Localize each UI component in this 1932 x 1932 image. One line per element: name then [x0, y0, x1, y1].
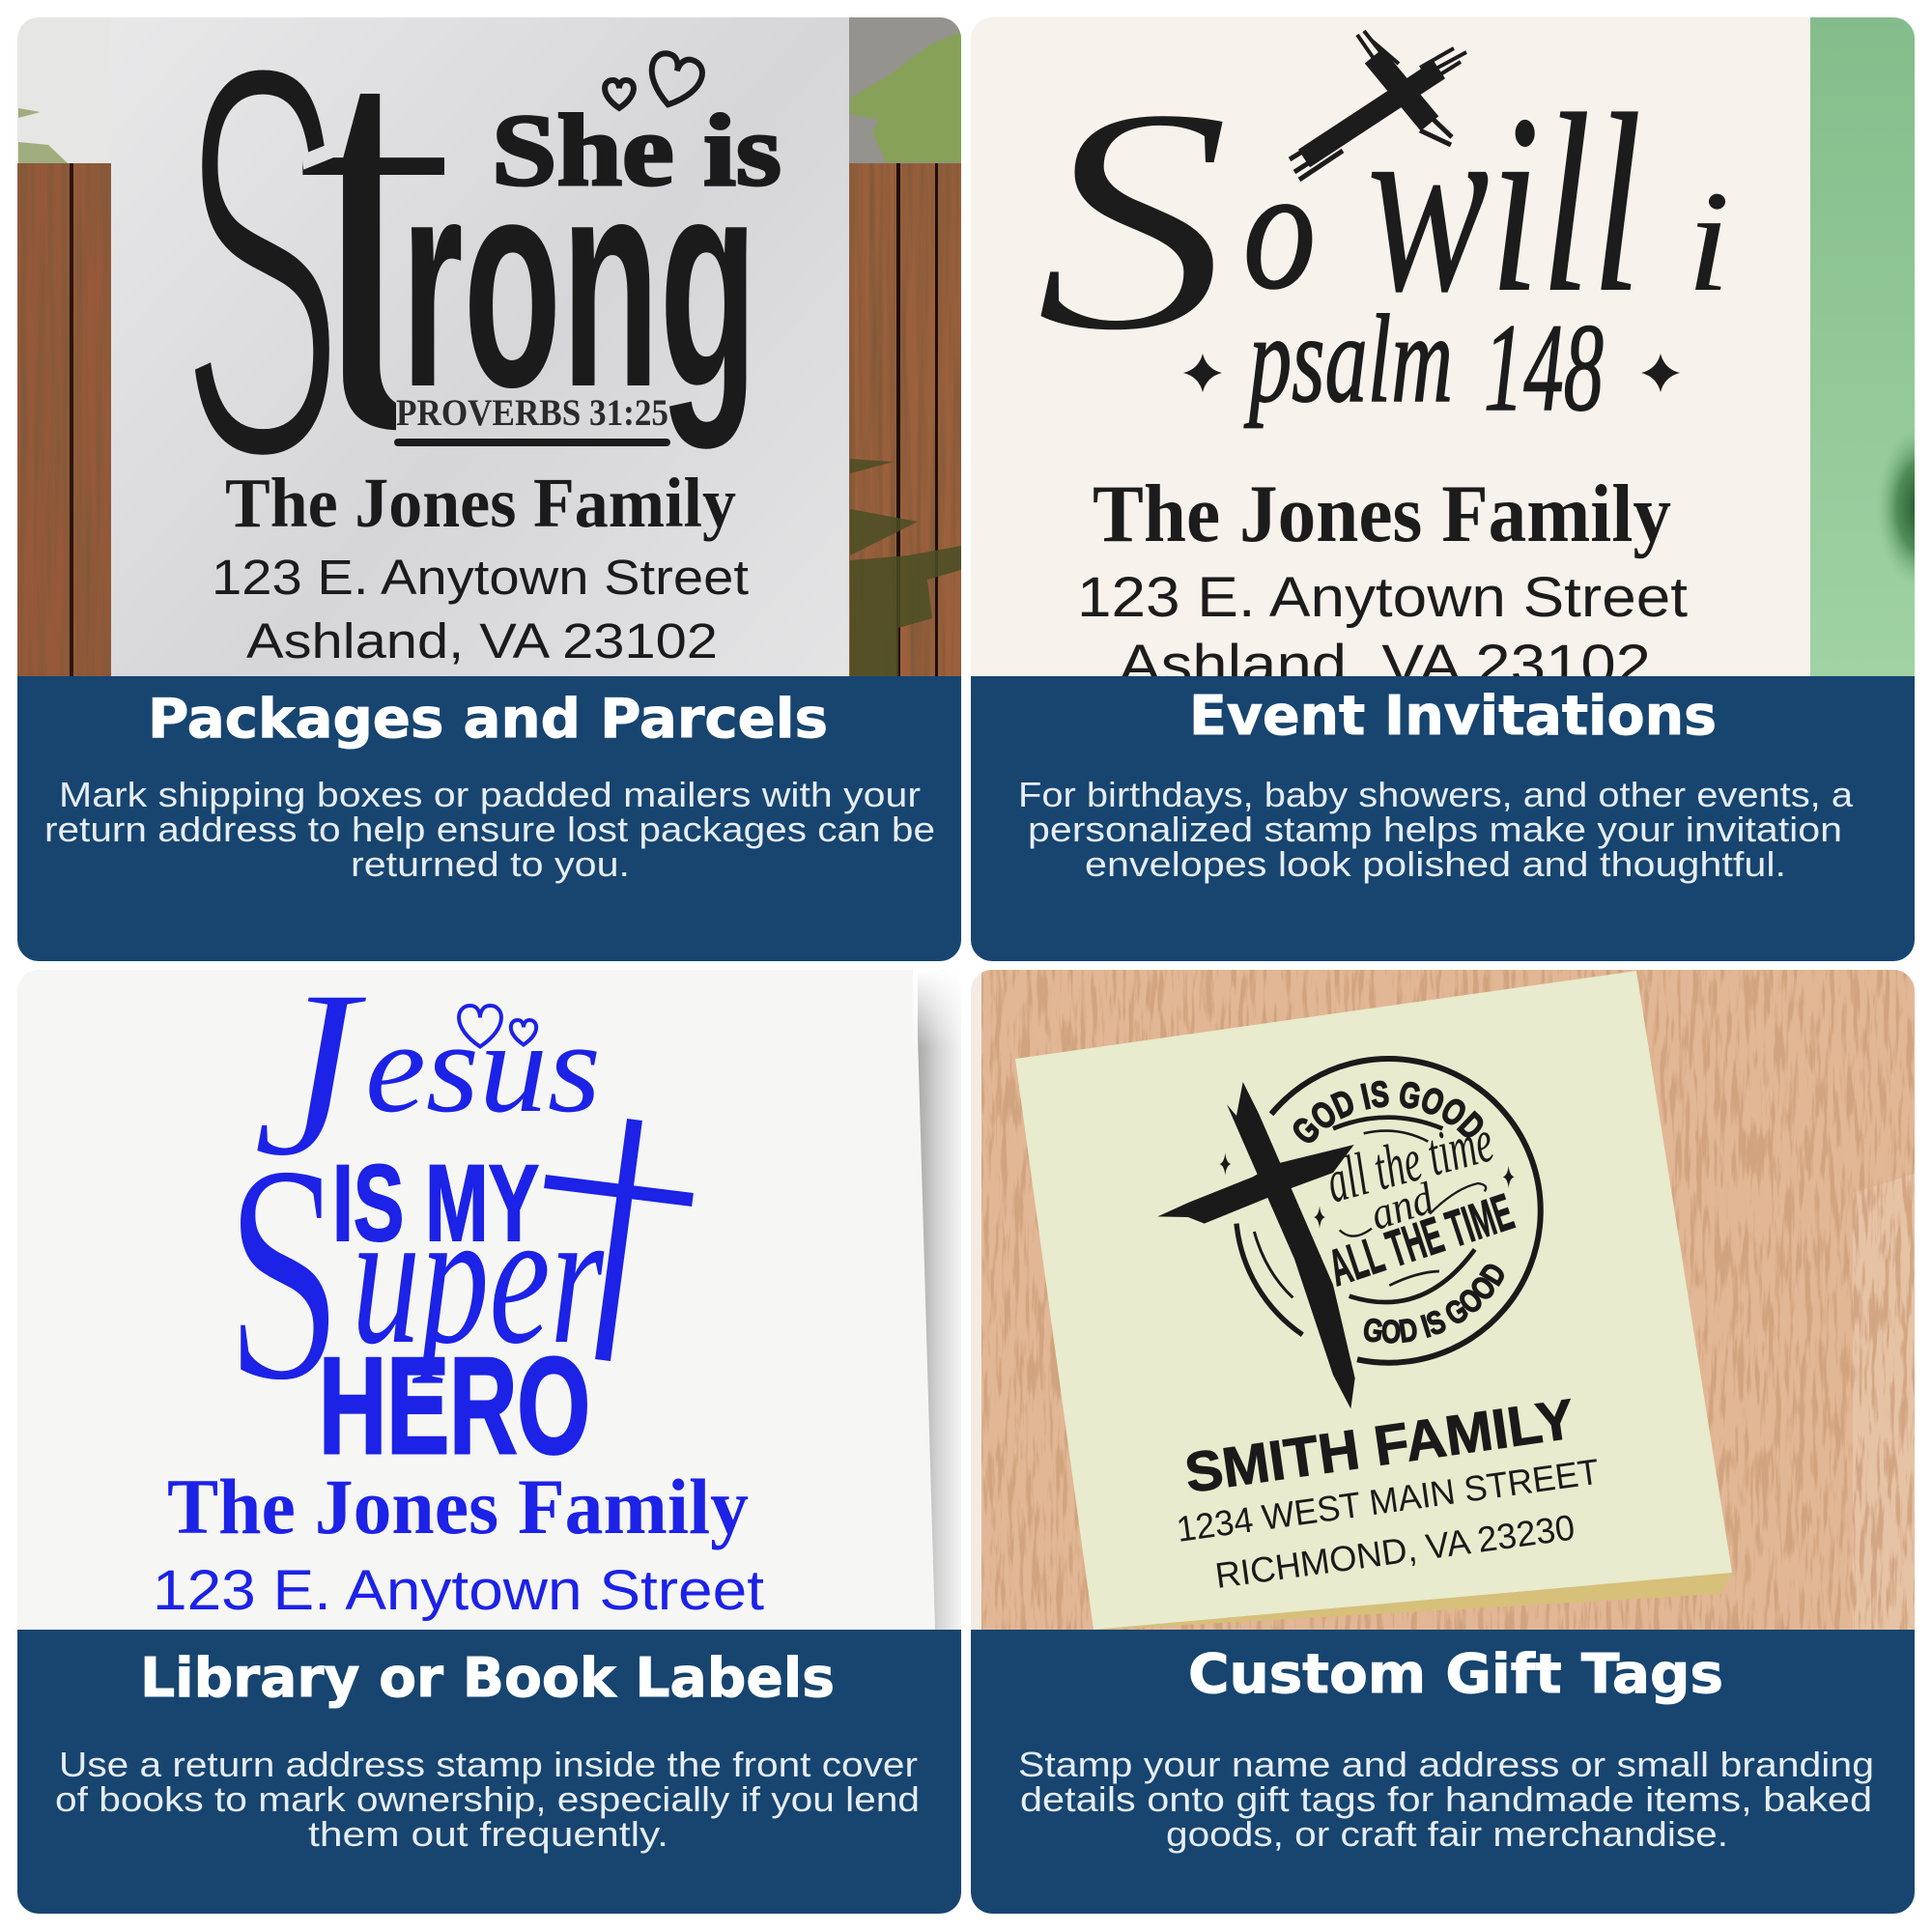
- caption band: [17, 1630, 961, 1914]
- headline: So will i: [1041, 111, 1725, 330]
- panel: Packages and Parcels: [17, 0, 961, 961]
- stamp art: God is good badge: [1157, 1056, 1544, 1408]
- heading: Event Invitations: [1189, 685, 1717, 748]
- address line 1: 1234 WEST MAIN STREET: [1174, 1452, 1602, 1549]
- description: [55, 1745, 920, 1854]
- description: Use a return address stamp inside the front cover: [59, 1745, 918, 1784]
- underline: [394, 439, 670, 446]
- badge rings: [1236, 1059, 1541, 1363]
- stamp art: She is Strong: [195, 50, 781, 665]
- address line: 123 E. Anytown Street: [153, 1559, 764, 1622]
- headline: So will i: o: [1243, 132, 1316, 325]
- panel: Library or Book Labels: [17, 940, 961, 1914]
- description: For birthdays, baby showers, and other events, a: [1018, 775, 1854, 814]
- icon: left star: [1183, 354, 1222, 392]
- text: God is good bottom: GOD IS GOOD: [1364, 1264, 1504, 1344]
- headline: So will i: will: [1367, 61, 1642, 346]
- stamp art: So will i: [1034, 31, 1730, 696]
- family name: The Jones Family: [167, 1463, 749, 1550]
- photo: cream card on green: [971, 17, 1932, 676]
- subhead: psalm 148: 148: [1484, 298, 1604, 438]
- address line 1: 123 E. Anytown Street: [1077, 566, 1688, 629]
- text: God is good top: GOD IS GOOD: [1293, 1080, 1484, 1143]
- block text: HERO: HERO: [319, 1329, 590, 1483]
- photo: stamped sheet on wood fence: [17, 17, 961, 676]
- block text: all the time: ALL THE TIME: [1322, 1183, 1520, 1297]
- heading: Packages and Parcels: [148, 688, 828, 751]
- description: details onto gift tags for handmade items, baked: [1020, 1779, 1872, 1819]
- script: all the time: all the time: [1320, 1107, 1500, 1216]
- address line 2: RICHMOND, VA 23230: [1213, 1507, 1577, 1596]
- script: Super: uper: [352, 1171, 605, 1384]
- description: personalized stamp helps make your invitation: [1028, 810, 1842, 849]
- address line 2: Ashland, VA 23102: [246, 613, 718, 668]
- icon: right star: [1641, 354, 1680, 392]
- photo: sticky note on wood: [971, 970, 1915, 1630]
- description: them out frequently.: [308, 1814, 668, 1854]
- heading: Library or Book Labels: [140, 1647, 835, 1710]
- headline: She is: She is: [492, 94, 781, 207]
- description: return address to help ensure lost packages can be: [44, 810, 935, 849]
- icon: cross: [545, 1120, 693, 1360]
- script: Jesus: [252, 940, 601, 1208]
- icon: hearts: [459, 1006, 536, 1047]
- headline: So will i: i: [1687, 161, 1730, 322]
- icon: brush cross: [1157, 1082, 1355, 1408]
- headline: So will i: S: [1034, 41, 1232, 399]
- address line 2: Ashland, VA 23102: [1119, 634, 1651, 696]
- description: returned to you.: [351, 844, 630, 884]
- headline: Strong: [195, 70, 747, 455]
- description: [1018, 1745, 1874, 1854]
- description: goods, or craft fair merchandise.: [1166, 1814, 1728, 1854]
- panel: Custom Gift Tags: [971, 970, 1915, 1914]
- icon: brush cross: [1290, 31, 1466, 180]
- family name: The Jones Family: [225, 464, 736, 542]
- description: Stamp your name and address or small branding: [1018, 1745, 1874, 1784]
- script: Super: [225, 1099, 605, 1447]
- icon: hearts: [605, 50, 705, 111]
- panel: Event Invitations: [971, 17, 1932, 961]
- description: envelopes look polished and thoughtful.: [1085, 844, 1786, 884]
- headline: Strong: rong: [401, 114, 757, 451]
- family name: SMITH FAMILY: [1181, 1387, 1578, 1505]
- description: [1018, 775, 1854, 884]
- script: Super: S: [225, 1099, 343, 1447]
- icon: sparkles: [1219, 1152, 1515, 1229]
- description: Mark shipping boxes or padded mailers with your: [59, 775, 921, 814]
- caption band: [971, 1630, 1915, 1914]
- description: of books to mark ownership, especially if you lend: [55, 1779, 920, 1819]
- block text: IS MY: IS MY: [332, 1143, 539, 1264]
- family name: The Jones Family: [1093, 469, 1671, 559]
- script: Jesus: J: [252, 940, 368, 1208]
- description: [44, 775, 935, 884]
- script: Jesus: esus: [365, 996, 601, 1140]
- photo: white sheet with shadow: [17, 970, 961, 1630]
- note pad: [1094, 1573, 1732, 1630]
- heading: Custom Gift Tags: [1188, 1643, 1723, 1706]
- scripture reference: PROVERBS 31:25: [396, 392, 668, 434]
- script: and: and: [1364, 1173, 1440, 1240]
- caption band: [971, 676, 1915, 961]
- stamp art: Jesus is my Super Hero: [153, 940, 764, 1622]
- caption band: [17, 676, 961, 961]
- address line 1: 123 E. Anytown Street: [212, 550, 749, 605]
- subhead: psalm 148: psalm: [1244, 290, 1453, 429]
